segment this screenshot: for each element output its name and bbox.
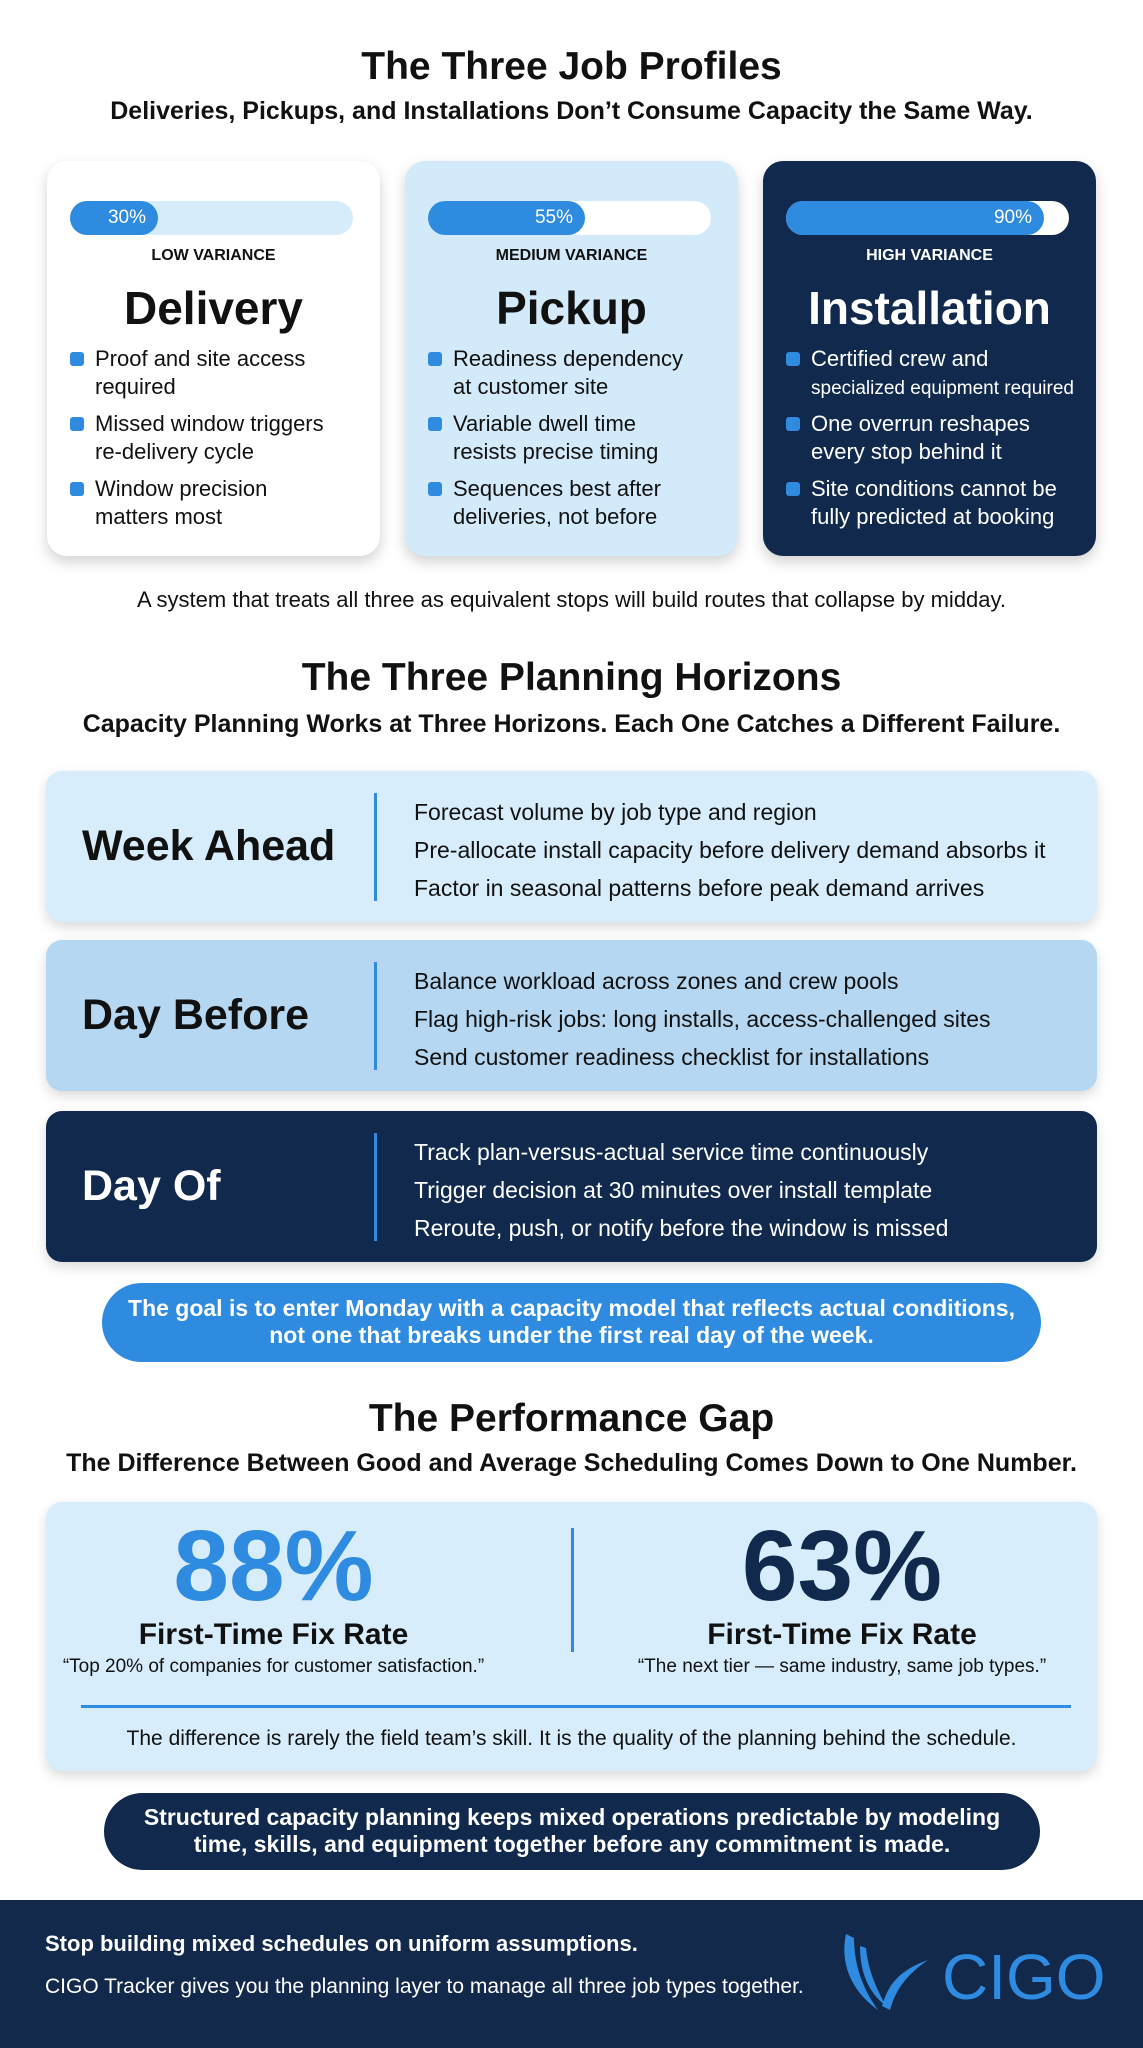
progress bar 90% <box>786 201 1069 235</box>
card: installation <box>763 161 1096 556</box>
callout: goal: not one that breaks under the first real day of the week. <box>269 1322 874 1348</box>
stat: 88%: “Top 20% of companies for customer satisfaction.” <box>63 1656 484 1677</box>
stat: 63%: “The next tier — same industry, same job types.” <box>638 1656 1046 1677</box>
row: week ahead: Pre-allocate install capacity before delivery demand absorbs it <box>414 837 1046 863</box>
callout: goal <box>102 1283 1041 1362</box>
text: performance note: The difference is rarely the field team’s skill. It is the quality of the planning behind the schedule. <box>127 1727 1016 1750</box>
row: week ahead: Week Ahead <box>82 822 335 870</box>
bullets: pickup: deliveries, not before <box>453 504 657 529</box>
stat: 88%: 88% <box>173 1510 374 1622</box>
bullets: pickup <box>428 346 683 529</box>
progress bar 90%: 90% <box>994 207 1032 228</box>
footer text: Stop building mixed schedules on uniform assumptions. <box>45 1931 638 1956</box>
bullets: delivery: Window precision <box>95 476 267 501</box>
card: delivery <box>47 161 380 556</box>
bullets: delivery: Proof and site access <box>95 346 305 371</box>
subtitle: performance gap: The Difference Between Good and Average Scheduling Comes Down to One Number. <box>66 1449 1077 1477</box>
row: week ahead: Factor in seasonal patterns before peak demand arrives <box>414 875 984 901</box>
callout: structured planning: Structured capacity planning keeps mixed operations predictable by modeling <box>144 1804 1000 1830</box>
card: installation: HIGH VARIANCE <box>866 247 993 264</box>
bullets: installation: fully predicted at booking <box>811 504 1054 529</box>
card: delivery: LOW VARIANCE <box>151 247 276 264</box>
row: week ahead: Forecast volume by job type and region <box>414 799 817 825</box>
panel: performance stats <box>46 1502 1097 1771</box>
footer text <box>45 1931 804 1998</box>
footer text: CIGO Tracker gives you the planning layer to manage all three job types together. <box>45 1975 804 1998</box>
progress bar 55%: 55% <box>535 207 573 228</box>
card: pickup: MEDIUM VARIANCE <box>496 247 647 264</box>
stat: 63%: First-Time Fix Rate <box>707 1618 977 1651</box>
row: day of: Reroute, push, or notify before the window is missed <box>414 1215 948 1241</box>
progress bar 30% <box>70 201 353 235</box>
bullets: pickup: resists precise timing <box>453 439 658 464</box>
row: day of: Trigger decision at 30 minutes over install template <box>414 1177 932 1203</box>
logo: CIGO <box>844 1934 1106 2013</box>
footer <box>0 1900 1143 2048</box>
bullets: installation: Certified crew and <box>811 346 988 371</box>
progress bar 30%: 30% <box>108 207 146 228</box>
subtitle: job profiles: Deliveries, Pickups, and Installations Don’t Consume Capacity the Same Way. <box>110 97 1033 125</box>
row: day of: Day Of <box>82 1162 221 1210</box>
progress bar 55% <box>428 201 711 235</box>
stat: 88%: First-Time Fix Rate <box>139 1618 408 1651</box>
card: installation: Installation <box>808 282 1051 334</box>
card: pickup <box>405 161 738 556</box>
title: performance gap: The Performance Gap <box>369 1397 774 1440</box>
card: delivery: Delivery <box>124 282 303 334</box>
footnote: job profiles: A system that treats all three as equivalent stops will build routes that collapse by midday. <box>137 587 1006 612</box>
bullets: installation <box>786 346 1074 529</box>
row: day before: Send customer readiness checklist for installations <box>414 1044 929 1070</box>
row: day before: Balance workload across zones and crew pools <box>414 968 899 994</box>
row: day of <box>46 1111 1097 1262</box>
stat: 88% <box>63 1510 484 1677</box>
stat: 63%: 63% <box>742 1510 942 1622</box>
logo: CIGO: CIGO <box>942 1941 1106 2013</box>
row: day before <box>46 940 1097 1091</box>
bullets: delivery: re-delivery cycle <box>95 439 254 464</box>
bullets: delivery: required <box>95 374 176 399</box>
callout: structured planning: time, skills, and equipment together before any commitment is made. <box>194 1831 950 1857</box>
bullets: installation: One overrun reshapes <box>811 411 1030 436</box>
subtitle: planning horizons: Capacity Planning Works at Three Horizons. Each One Catches a Different Failure. <box>83 710 1060 738</box>
row: week ahead <box>46 771 1097 922</box>
row: day before: Flag high-risk jobs: long installs, access-challenged sites <box>414 1006 991 1032</box>
row: day before: Day Before <box>82 991 309 1039</box>
callout: goal: The goal is to enter Monday with a capacity model that reflects actual conditions, <box>128 1295 1015 1321</box>
bullets: delivery: matters most <box>95 504 222 529</box>
bullets: installation: Site conditions cannot be <box>811 476 1057 501</box>
bullets: pickup: Sequences best after <box>453 476 661 501</box>
bullets: delivery: Missed window triggers <box>95 411 324 436</box>
bullets: delivery <box>70 346 324 529</box>
bullets: installation: every stop behind it <box>811 439 1002 464</box>
bullets: pickup: Readiness dependency <box>453 346 683 371</box>
bullets: installation: specialized equipment required <box>811 378 1074 399</box>
title: planning horizons: The Three Planning Horizons <box>302 656 841 699</box>
row: day of: Track plan-versus-actual service time continuously <box>414 1139 928 1165</box>
bullets: pickup: at customer site <box>453 374 608 399</box>
bullets: pickup: Variable dwell time <box>453 411 636 436</box>
title: job profiles: The Three Job Profiles <box>361 45 782 88</box>
callout: structured planning <box>104 1793 1040 1870</box>
card: pickup: Pickup <box>496 282 647 334</box>
stat: 63% <box>638 1510 1046 1677</box>
